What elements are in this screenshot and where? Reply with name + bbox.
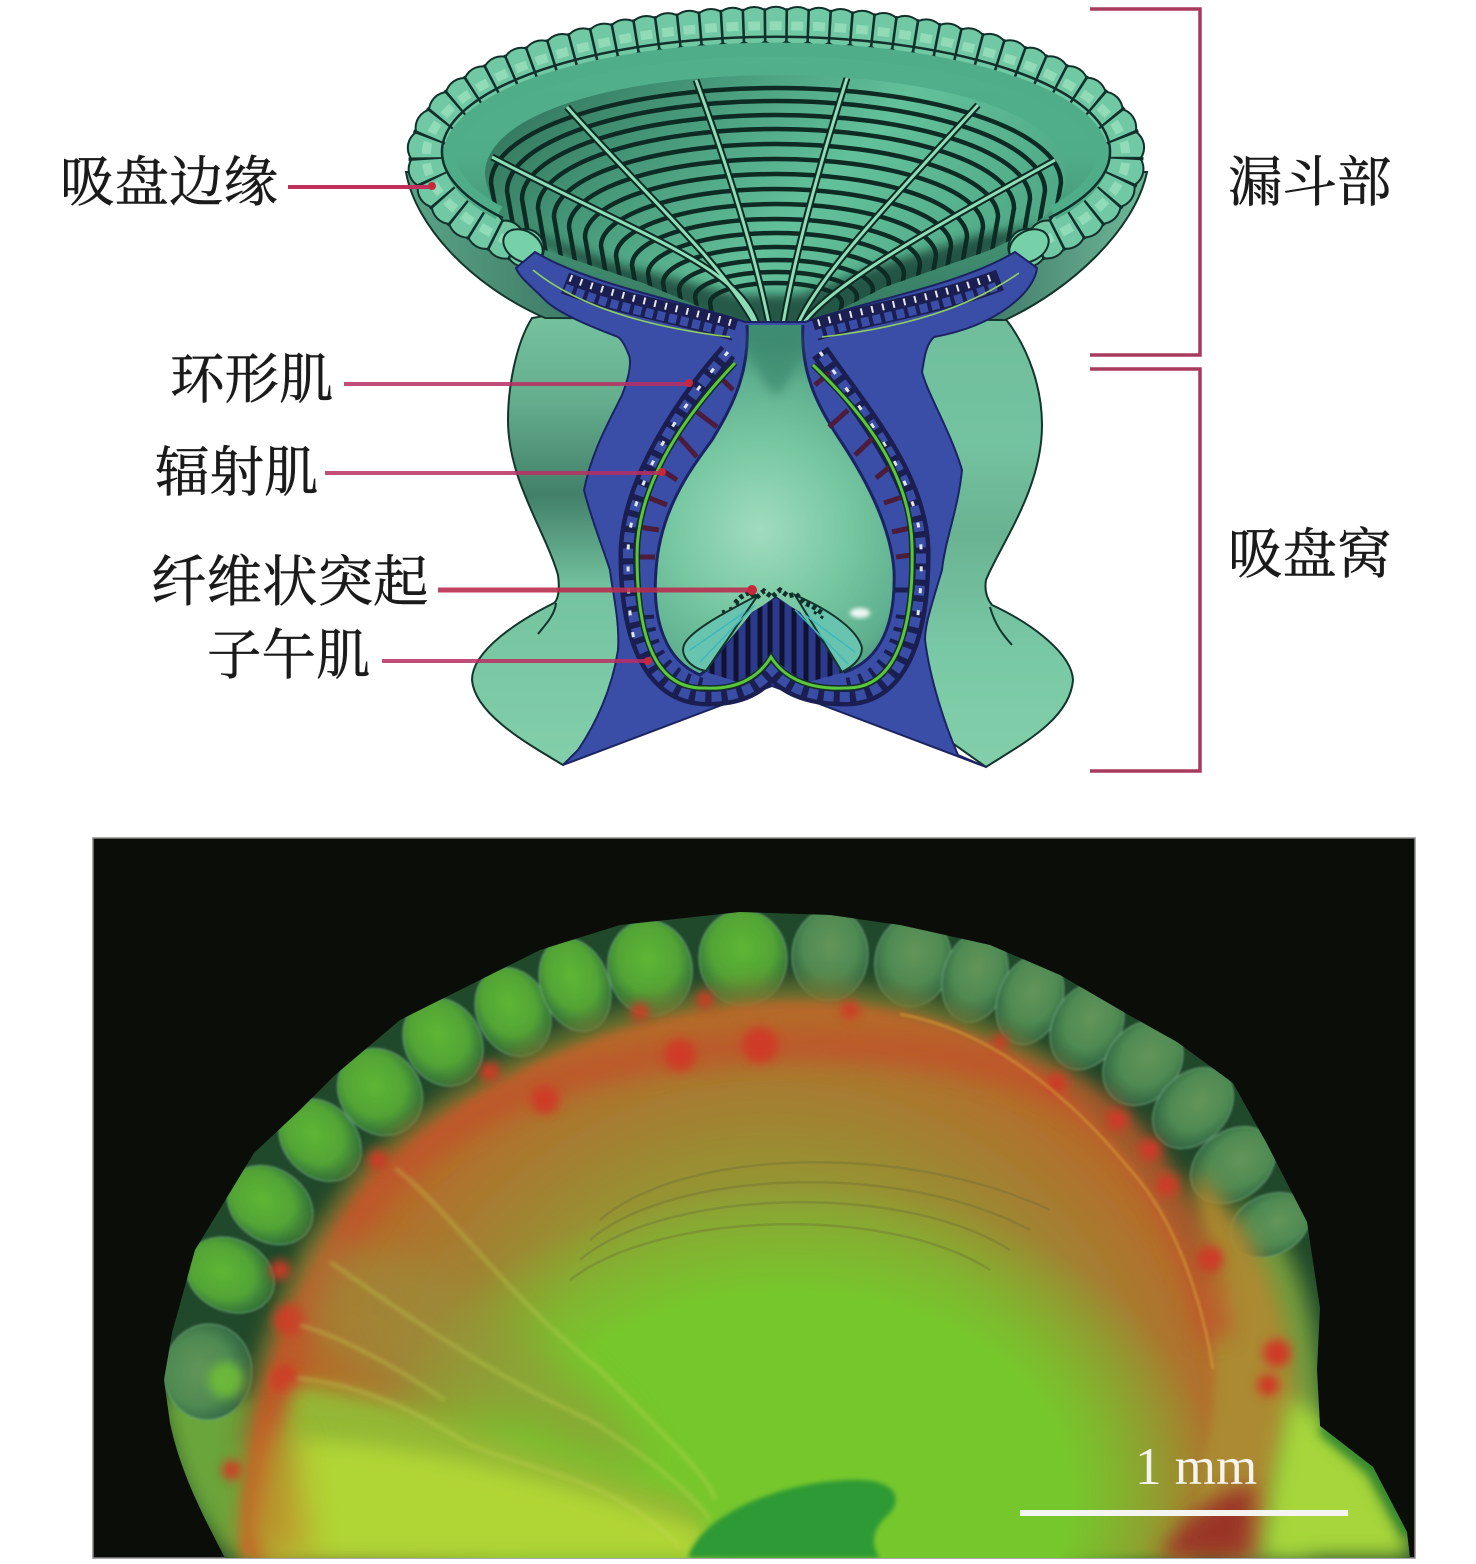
green central field bbox=[403, 1206, 1202, 1558]
label text: 环形肌: 环形肌 bbox=[170, 349, 334, 410]
specimen disc bbox=[93, 900, 1415, 1560]
specular highlight bbox=[850, 608, 870, 618]
leader line bbox=[325, 471, 662, 475]
bottom-left yellow fan bbox=[255, 1385, 715, 1558]
flange muscle bands bbox=[533, 270, 1019, 337]
outer body right bbox=[920, 300, 1073, 767]
soft edge of lower right tissue bbox=[1322, 1428, 1409, 1534]
right orange margin bbox=[1170, 1170, 1295, 1558]
label: radial muscle bbox=[155, 442, 666, 503]
panel: fluorescence micrograph bbox=[93, 838, 1415, 1560]
label text: 吸盘边缘: 吸盘边缘 bbox=[60, 152, 278, 213]
dark green central blob bbox=[688, 1480, 896, 1558]
bracket: acetabulum bbox=[1090, 369, 1200, 771]
inner muscle blocks at cavity bottom bbox=[648, 615, 902, 684]
outer body left bbox=[472, 300, 640, 765]
leader line bbox=[438, 588, 752, 592]
rim beads bbox=[426, 26, 1126, 248]
label text: 辐射肌: 辐射肌 bbox=[155, 442, 319, 503]
right inner orange line bbox=[900, 1014, 1213, 1369]
leader line bbox=[382, 659, 648, 663]
radial muscle bars bbox=[639, 372, 912, 590]
bright spot in lower left bead bbox=[208, 1362, 244, 1398]
bracket: infundibulum bbox=[1090, 9, 1200, 355]
bowl underside bbox=[406, 172, 1147, 320]
funnel neck and cavity bbox=[655, 325, 894, 675]
muscle under fold bbox=[706, 598, 845, 682]
label: meridional muscle bbox=[207, 625, 652, 686]
muscle layer with circular muscle dots bbox=[628, 352, 921, 697]
marginal beads bbox=[160, 907, 1321, 1424]
red patches bbox=[222, 991, 1291, 1557]
inner funnel ring bbox=[442, 40, 1110, 325]
orange-red ring bbox=[262, 1045, 1215, 1540]
photo background bbox=[93, 838, 1415, 1558]
body fold lines bbox=[538, 603, 1012, 645]
growth ring lines bbox=[570, 1162, 1050, 1280]
scale label: 1 mm bbox=[1135, 1438, 1257, 1496]
neck green wall shading bbox=[750, 335, 800, 395]
radial grid bbox=[485, 75, 1064, 321]
label text: 子午肌: 子午肌 bbox=[207, 625, 371, 686]
leader line bbox=[288, 185, 432, 189]
scale bar bbox=[1020, 1510, 1348, 1516]
label: 吸盘窝: 吸盘窝 bbox=[1228, 524, 1392, 585]
blue cross-section bbox=[516, 252, 1037, 767]
label: rim bbox=[60, 152, 436, 213]
dark red base patch bbox=[1160, 1485, 1255, 1558]
disc interior bbox=[240, 1000, 1215, 1558]
fibrous protrusion lobes bbox=[683, 590, 862, 672]
lower right yellow-green tissue bbox=[1262, 1395, 1410, 1558]
bead to disc transition bbox=[255, 1000, 1200, 1450]
rim end beads bbox=[497, 223, 1055, 269]
green fibre line bbox=[637, 363, 912, 688]
panel: suction cup 3D model bbox=[406, 26, 1147, 767]
label: circular muscle bbox=[170, 349, 693, 410]
label: 漏斗部: 漏斗部 bbox=[1228, 152, 1392, 213]
olive fan folds bbox=[300, 1240, 650, 1470]
label: fibrous protrusions bbox=[151, 553, 757, 614]
label text: 纤维状突起: 纤维状突起 bbox=[151, 553, 429, 614]
leader line bbox=[344, 382, 690, 386]
side margin tissue, olive bbox=[1230, 1200, 1325, 1560]
